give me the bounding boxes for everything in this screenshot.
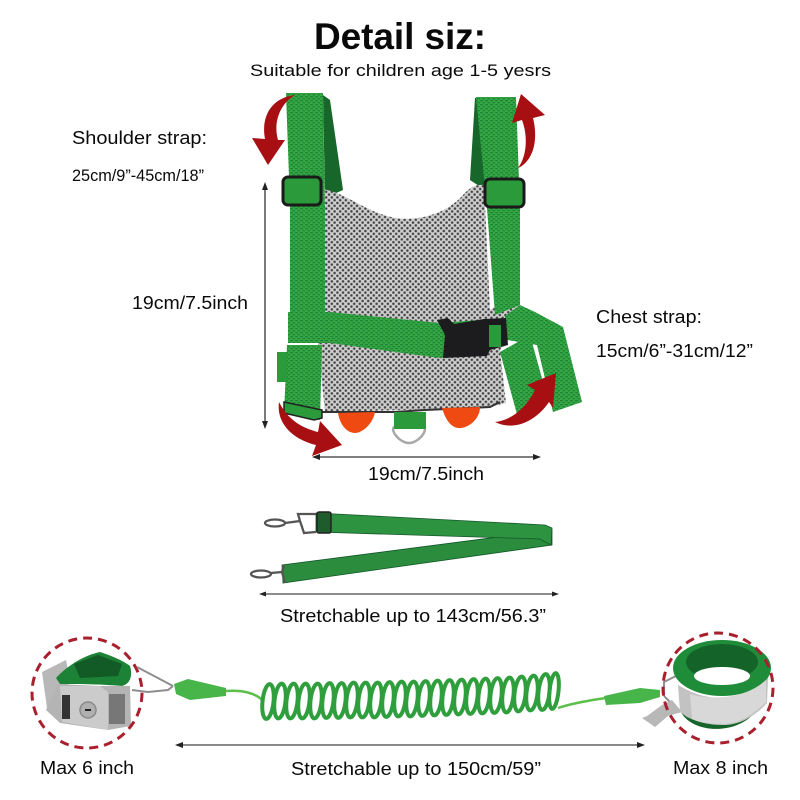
buckle button: [80, 702, 96, 718]
lower left strap: [284, 345, 322, 420]
height dimension arrow: [262, 182, 268, 429]
title: Detail siz:: [314, 16, 486, 57]
left wrist label: Max 6 inch: [40, 758, 134, 778]
red adjustment arrows: [252, 94, 556, 456]
bottom orange tab left: [338, 412, 375, 433]
lower hook: [251, 565, 285, 583]
shoulder strap label: 25cm/9”-45cm/18”: [72, 166, 204, 185]
side loop: [277, 352, 287, 382]
chest strap drop: [500, 335, 548, 418]
left slider buckle: [283, 177, 321, 205]
bottom orange tab right: [442, 407, 480, 428]
lower left slider: [284, 402, 322, 420]
left shoulder strap: [286, 93, 325, 312]
strap length arrow: [259, 592, 559, 596]
strap length label: Stretchable up to 143cm/56.3”: [280, 606, 546, 626]
harness vest: [277, 93, 582, 443]
width label: 19cm/7.5inch: [368, 464, 484, 484]
green padding: [56, 652, 131, 686]
grey band back: [42, 660, 70, 708]
subtitle: Suitable for children age 1-5 yesrs: [250, 61, 551, 80]
right wrist label: Max 8 inch: [673, 758, 768, 778]
D ring tab: [394, 412, 426, 429]
mesh panel: [318, 185, 520, 412]
buckle body: [46, 684, 131, 730]
arrow bottom left: [279, 402, 342, 456]
velcro patch: [690, 680, 766, 724]
back strap left: [323, 95, 343, 198]
shoulder strap label: [72, 128, 207, 185]
back strap right: [470, 97, 485, 190]
left dashed circle: [32, 638, 142, 748]
height label: 19cm/7.5inch: [132, 293, 248, 313]
lower band: [680, 702, 762, 729]
green ring: [673, 640, 771, 696]
chest strap right tail: [505, 305, 582, 412]
left cable: [226, 691, 264, 702]
cable length label: Stretchable up to 150cm/59”: [291, 759, 541, 779]
right cable: [558, 698, 606, 708]
mesh bottom edge: [322, 402, 500, 412]
right shoulder strap: [476, 97, 520, 315]
right carabiner: [664, 676, 676, 702]
upper hook: [265, 514, 316, 533]
chest buckle: [437, 318, 508, 358]
D ring: [393, 427, 425, 443]
chest strap: [288, 312, 505, 358]
extension strap: [251, 512, 552, 583]
arrow top right: [512, 94, 545, 168]
chest strap label: Chest strap:: [596, 307, 702, 327]
arrow bottom right: [495, 373, 556, 426]
right lock key: [642, 700, 682, 727]
shoulder strap label: Shoulder strap:: [72, 128, 207, 148]
buckle clip: [60, 686, 108, 730]
right dashed circle: [663, 633, 773, 743]
right connector: [604, 688, 660, 705]
arrow top left: [252, 95, 295, 165]
grey strap: [678, 678, 768, 725]
width dimension arrow: [312, 454, 541, 460]
lower strap band: [282, 530, 552, 583]
slider on upper strap: [317, 512, 331, 533]
right slider buckle: [485, 179, 524, 207]
inner padding: [686, 644, 758, 680]
left wristband: [42, 652, 131, 730]
upper strap band: [316, 513, 552, 545]
coiled cable: [261, 673, 560, 719]
left carabiner: [132, 667, 173, 692]
cable length arrow: [175, 742, 645, 748]
left connector: [174, 679, 226, 700]
wrist opening: [694, 667, 750, 685]
chest strap label: 15cm/6”-31cm/12”: [596, 341, 753, 361]
chest strap label: [596, 307, 753, 361]
right wristband: [673, 640, 771, 729]
